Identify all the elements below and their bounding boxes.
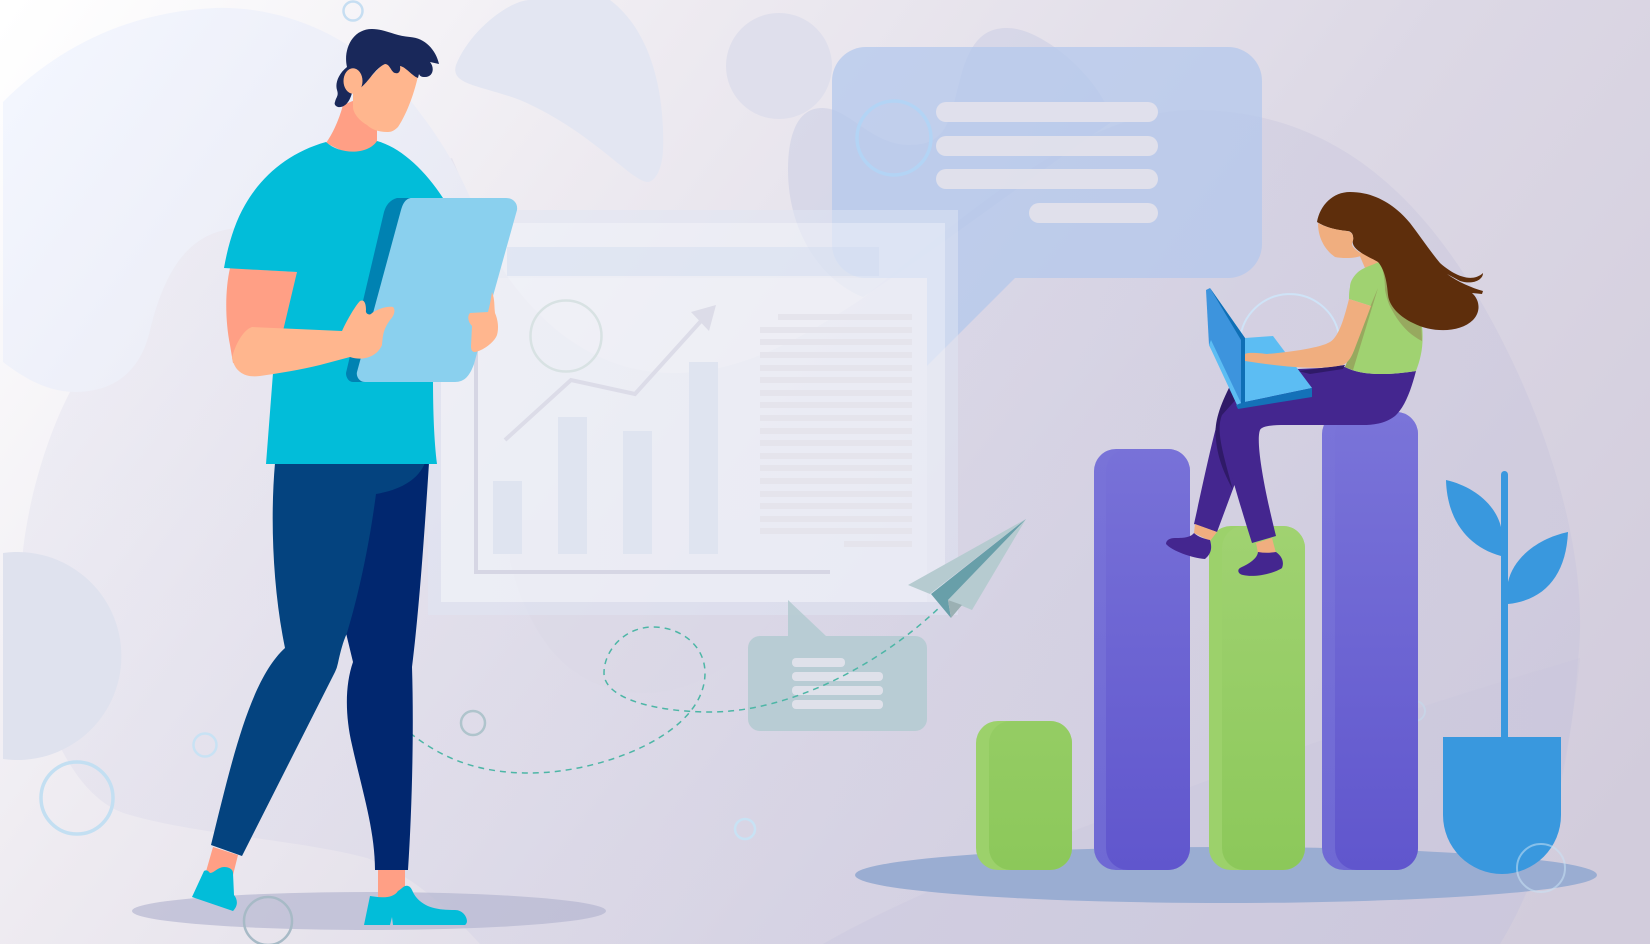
icon: paper plane: [908, 519, 1026, 618]
bar 2: [1094, 449, 1190, 870]
shoes: [192, 867, 467, 925]
shirt: [1345, 262, 1423, 374]
decorative arc behind laptop: [1240, 294, 1339, 340]
figure: man with tablet: [192, 29, 517, 925]
tablet front: [357, 198, 517, 382]
ankles: [1194, 524, 1276, 553]
chart axis: [476, 347, 830, 572]
bars chart: growth columns: [976, 412, 1418, 870]
bar chart: [493, 362, 718, 554]
front leg: [211, 463, 425, 856]
icon: plant in pot: [1443, 471, 1568, 874]
bar 4: [1322, 412, 1418, 870]
far leg: [1194, 388, 1245, 532]
trend arrow: [505, 305, 716, 440]
face: [1318, 223, 1363, 258]
speech bubble: large: [832, 47, 1262, 366]
ring: [530, 300, 602, 372]
t-shirt: [224, 141, 443, 464]
back leg: [346, 463, 429, 870]
laptop: [1206, 288, 1312, 409]
hair: [335, 29, 439, 107]
shoes: [1166, 533, 1283, 576]
figure: woman with laptop: [1166, 192, 1483, 576]
bar 1: [976, 721, 1072, 870]
far leg shadow: [1216, 388, 1240, 490]
ear: [344, 68, 362, 94]
upper arm: [226, 268, 297, 363]
text lines: [760, 314, 912, 547]
ankles: [205, 847, 405, 898]
right hand: [468, 292, 498, 352]
forearm and left hand: [232, 300, 394, 376]
ground shadow: bars: [855, 847, 1597, 903]
dashed flight path: [410, 605, 942, 773]
neck: [1359, 245, 1382, 268]
decorative ring: over pot: [1517, 844, 1565, 892]
decorative rings: [41, 2, 1425, 839]
ground shadow: man: [132, 892, 606, 930]
small speech bubble: [748, 600, 927, 731]
head: [353, 60, 418, 132]
tablet back: [346, 198, 410, 382]
hair: [1317, 192, 1483, 330]
decorative ring: near feet: [244, 897, 292, 944]
bar 3: [1209, 526, 1305, 870]
neck: [326, 100, 377, 155]
near leg and hips: [1222, 367, 1416, 543]
arm: [1245, 299, 1371, 368]
waist shadow: [1298, 365, 1345, 374]
panel: presentation board: [428, 210, 958, 615]
shirt shadows: [1345, 262, 1422, 370]
